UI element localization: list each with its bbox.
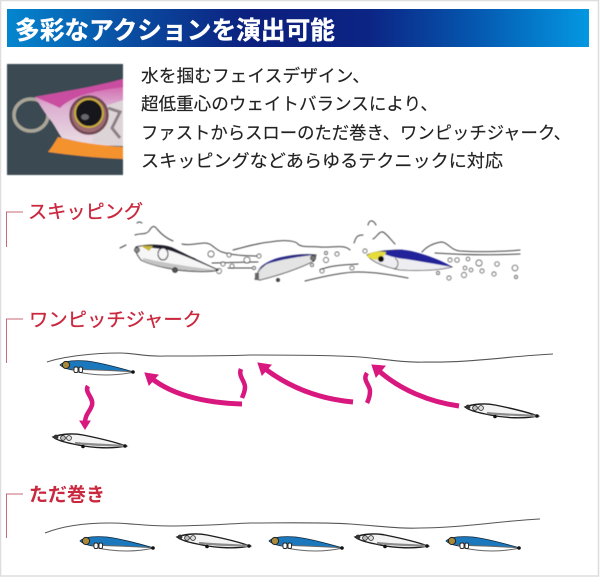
lure: white, right bbox=[465, 404, 539, 418]
lure: blue belly, middle bbox=[255, 255, 316, 282]
bubbles bbox=[190, 249, 518, 280]
lure row: five lures bbox=[80, 534, 521, 551]
text block: description: 超低重心のウェイトバランスにより、 bbox=[141, 94, 438, 114]
header banner bbox=[7, 9, 589, 47]
heading: main title: 多彩なアクションを演出可能 bbox=[15, 17, 335, 45]
photo: lure head close-up bbox=[7, 64, 123, 175]
lure: blue with yellow head, right bbox=[367, 250, 452, 270]
section: one-pitch jerk bbox=[6, 309, 553, 448]
lure: white, lower-left bbox=[53, 434, 127, 448]
arrow: wavy left bbox=[240, 369, 245, 398]
label: straight retrieve: ただ巻き bbox=[29, 484, 105, 506]
water surface line bbox=[45, 519, 540, 533]
label: one-pitch jerk: ワンピッチジャーク bbox=[29, 309, 202, 331]
text block: description: ファストからスローのただ巻き、ワンピッチジャーク、 bbox=[141, 123, 571, 143]
arrow: second jump bbox=[258, 363, 353, 402]
arrow: wavy right bbox=[365, 373, 370, 403]
text block: description: 水を掴むフェイスデザイン、 bbox=[141, 66, 370, 86]
arrow: first jump bbox=[145, 373, 242, 404]
section: straight retrieve bbox=[6, 484, 540, 551]
lure: blue, top-left bbox=[60, 361, 135, 375]
water splash lines bbox=[120, 221, 520, 281]
text block: description: スキッピングなどあらゆるテクニックに対応 bbox=[141, 151, 503, 171]
text block: description bbox=[141, 66, 571, 171]
arrow: third jump bbox=[372, 365, 459, 406]
label: skipping: スキッピング bbox=[28, 201, 143, 223]
section: skipping bbox=[6, 201, 520, 282]
water surface line bbox=[47, 353, 553, 362]
lure: white and black, left bbox=[134, 245, 218, 272]
arrow: wavy down bbox=[80, 386, 92, 429]
